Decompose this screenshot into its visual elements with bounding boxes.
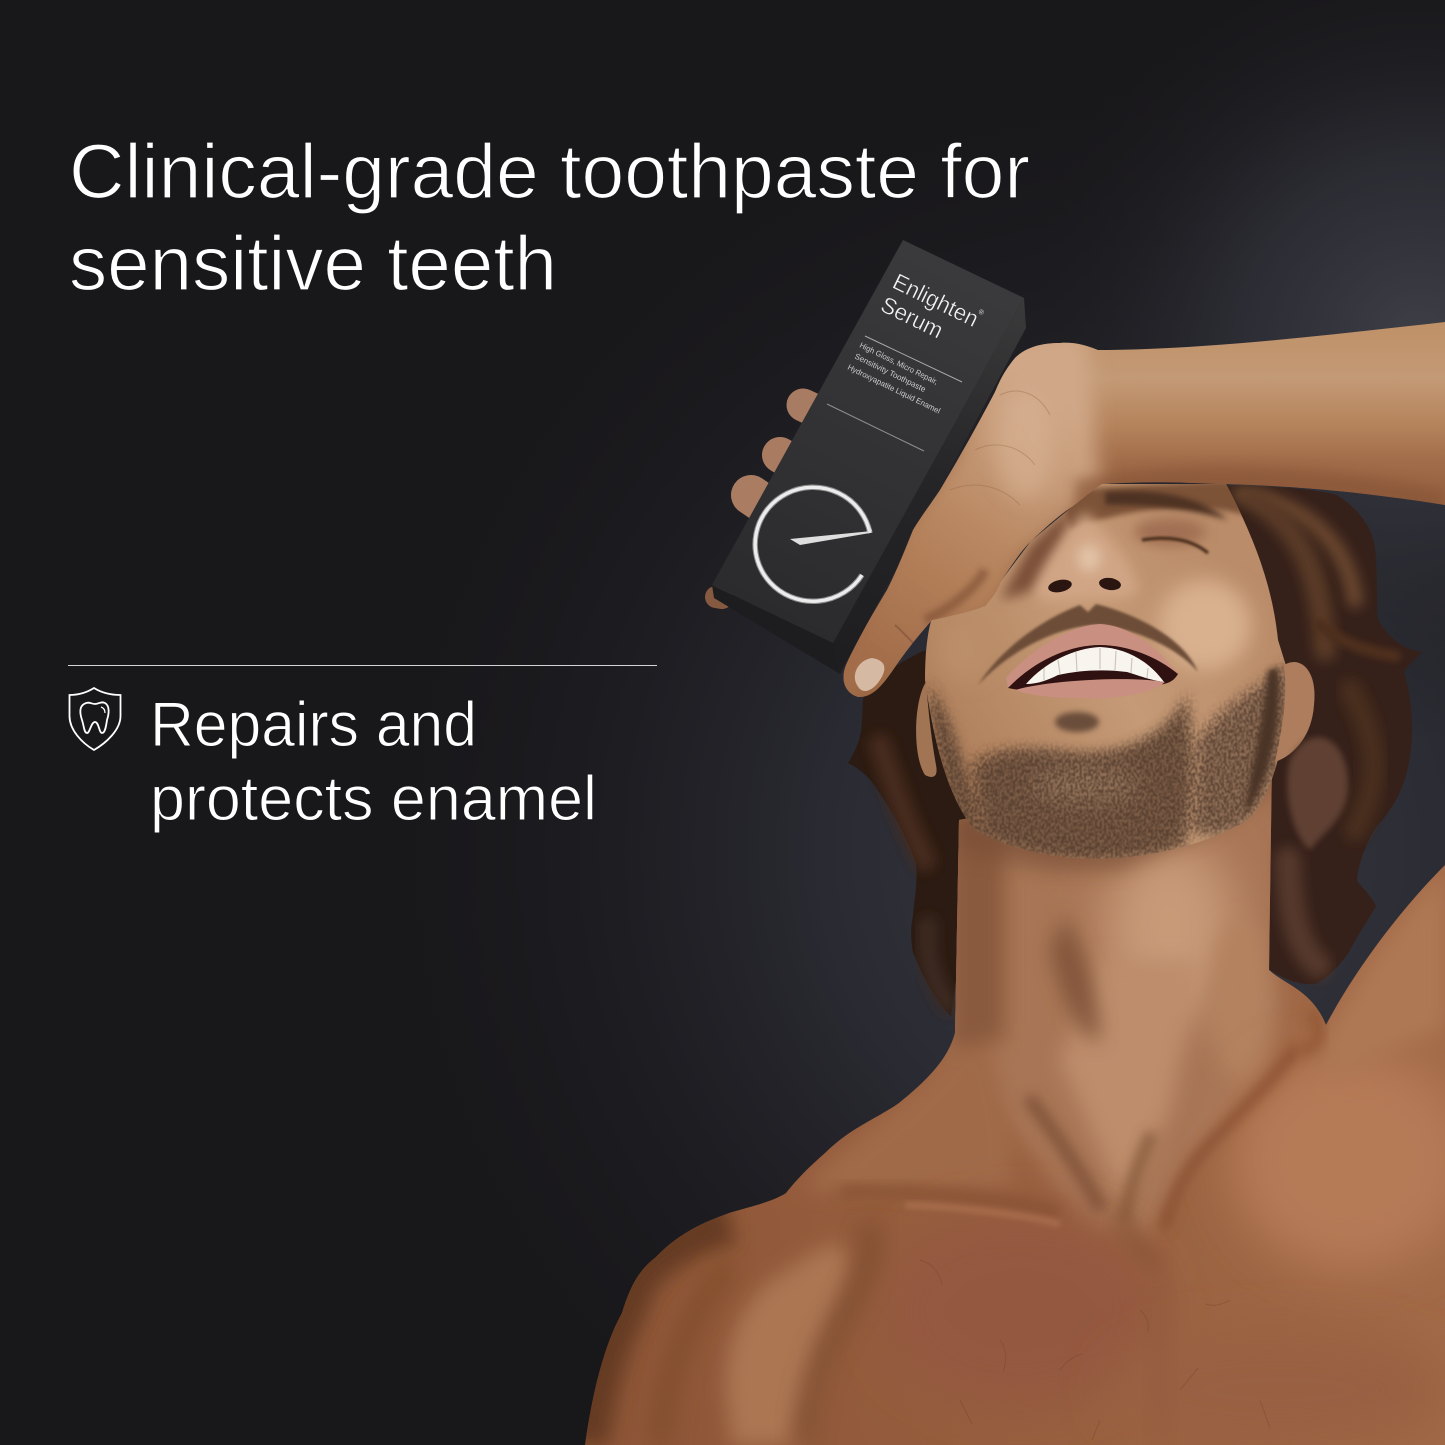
face: under arm shadow <box>1064 484 1242 530</box>
face: upper lip <box>1006 624 1178 688</box>
face: brow <box>1105 491 1228 520</box>
benefit text: Repairs and <box>150 690 477 760</box>
hand palm <box>830 330 1105 710</box>
box: description: Sensitivity Toothpaste <box>853 352 928 394</box>
face: side beard right base <box>1195 665 1286 833</box>
face: left socket shadow <box>1000 505 1072 600</box>
face: eye socket <box>1134 518 1206 546</box>
face: tooth gaps <box>1044 648 1148 680</box>
trapezius left <box>817 1044 1007 1188</box>
box: rule two <box>827 404 924 451</box>
box: description: Hydroxyapatite Liquid Enamel <box>846 363 942 416</box>
neck left darker <box>950 810 1005 1050</box>
neck shoulder crease <box>1163 1048 1296 1230</box>
photo: man holding product box <box>560 240 1445 1445</box>
wrist shadow <box>1075 466 1445 510</box>
box: bottom face <box>712 585 840 674</box>
hair <box>848 486 1422 1016</box>
box: front face <box>712 240 1024 643</box>
collarbone <box>840 1192 1060 1212</box>
fingers behind box <box>716 405 835 598</box>
face: cheek light <box>1159 580 1251 670</box>
title: sensitive teeth <box>69 221 557 307</box>
thumb crease <box>925 570 985 620</box>
box: description <box>846 341 942 416</box>
box: right side face <box>833 298 1026 674</box>
hair strands <box>880 494 1395 1005</box>
product box <box>712 240 1026 674</box>
right shoulder glow <box>1230 1050 1445 1270</box>
box: brand name line 2: Serum <box>877 291 948 343</box>
face: nose <box>1033 512 1138 601</box>
box: registered mark: ® <box>977 308 986 317</box>
face: mouth interior <box>1008 645 1178 692</box>
face: chin beard highlight <box>1030 765 1140 805</box>
face: soul patch <box>1055 712 1099 732</box>
box: brand name: Enlighten <box>889 268 983 332</box>
shoulder edge shadow <box>585 1222 730 1445</box>
face: teeth <box>1026 647 1164 684</box>
face <box>916 480 1315 864</box>
hand highlight <box>995 390 1055 500</box>
thumbnail <box>855 658 884 691</box>
face: left cheek light <box>940 620 990 680</box>
face: mustache <box>978 604 1198 685</box>
neck tendons <box>1028 1097 1102 1210</box>
hair curl by ear <box>1287 737 1348 850</box>
neck right <box>1213 938 1272 1070</box>
box: rule one <box>865 336 962 382</box>
neck light <box>1105 840 1235 1020</box>
benefit text <box>150 690 597 834</box>
box: silver e logo <box>755 487 872 601</box>
neck centre shadow <box>1050 915 1100 1040</box>
box: description: High Gloss, Micro Repair, <box>858 341 939 386</box>
chest centre <box>982 1211 1142 1376</box>
neck base <box>950 760 1281 1235</box>
divider rule <box>68 665 657 666</box>
benefit text: protects enamel <box>150 764 597 834</box>
title: Clinical-grade toothpaste for <box>69 129 1030 215</box>
chest midline shade <box>1150 1255 1170 1445</box>
face: dark jaw line <box>1245 668 1279 815</box>
title <box>69 129 1030 307</box>
under chin shadow <box>958 781 1272 879</box>
deltoid chest crease <box>802 1225 871 1445</box>
icon: shield with tooth <box>70 688 120 750</box>
ear right <box>1275 662 1315 762</box>
face: closed eye <box>1142 538 1208 553</box>
face: stubble <box>928 660 1289 864</box>
face: lower lip <box>1015 679 1165 698</box>
face: nostrils <box>1047 578 1073 594</box>
chest hair <box>920 1260 1270 1440</box>
face: chin beard base <box>975 700 1191 859</box>
ear left <box>916 682 937 777</box>
torso, neck and raised arm <box>560 745 1445 1445</box>
deltoid light <box>726 1245 850 1445</box>
raised arm and hand <box>830 310 1445 710</box>
hand wrinkles <box>950 391 1050 505</box>
face: side beard left <box>930 690 985 840</box>
